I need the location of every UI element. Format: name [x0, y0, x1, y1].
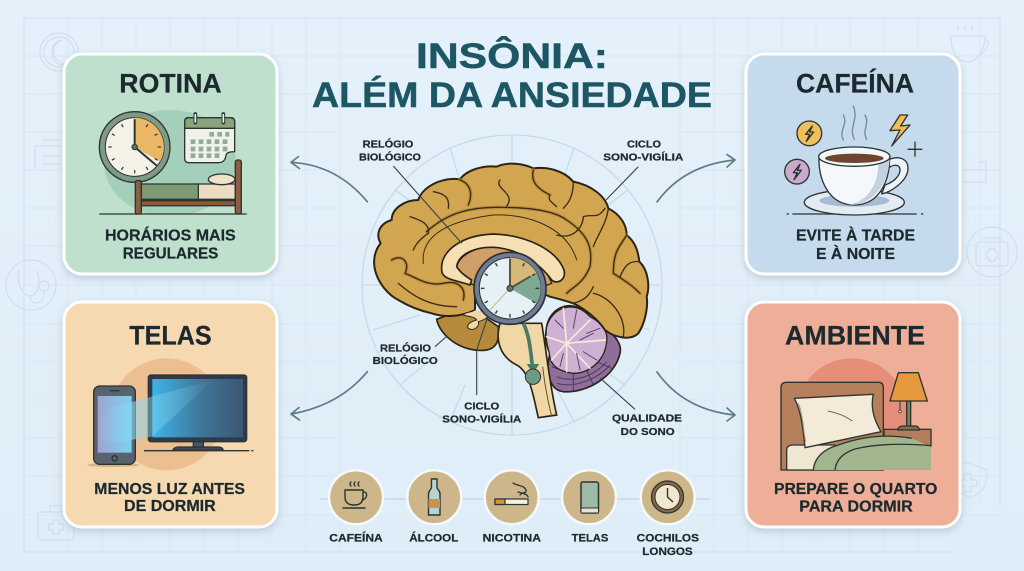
title line 1: INSÔNIA:: [416, 36, 608, 76]
label: relogio biologico bottom: [373, 342, 438, 367]
panel: rotina: [64, 54, 277, 274]
card background: [64, 302, 277, 527]
arrow: brain to telas: [291, 372, 367, 420]
leader line: qualidade: [600, 378, 635, 409]
label: ciclo sono-vigilia bottom: [442, 400, 522, 425]
label: relogio biologico bottom: BIOLÓGICO: [373, 354, 438, 367]
caption: E À NOITE: [816, 246, 895, 263]
panel: cafeina: [746, 54, 960, 274]
factor: cafeina: [329, 470, 383, 545]
arrow: brain to rotina: [291, 156, 367, 202]
background icon: bed: [35, 140, 62, 170]
panel: ambiente: [746, 302, 960, 527]
title line 2: ALÉM DA ANSIEDADE: [312, 75, 712, 115]
heading: ambiente: AMBIENTE: [785, 320, 925, 350]
illustration: phone and monitor: [87, 358, 253, 470]
arrow: brain to cafeina: [657, 154, 735, 202]
caption: [796, 228, 915, 263]
heading: telas: TELAS: [129, 320, 212, 350]
factor row: [329, 470, 699, 558]
card background: [746, 302, 960, 527]
factor: alcool: ÁLCOOL: [409, 532, 459, 545]
pituitary: [463, 310, 490, 329]
background icon: stethoscope: [6, 260, 56, 310]
caption: EVITE À TARDE: [796, 228, 915, 245]
caption: [774, 481, 937, 516]
label: ciclo sono-vigilia top: [603, 139, 684, 164]
caption: PREPARE O QUARTO: [774, 481, 937, 498]
card background: [746, 54, 960, 274]
arrow: brain to ambiente: [657, 372, 735, 421]
label: ciclo sono-vigilia bottom: CICLO: [464, 400, 499, 412]
factor: cochilos longos: COCHILOS: [637, 533, 699, 545]
factor: nicotina: [483, 470, 541, 545]
cerebellum: [546, 306, 620, 392]
label: relogio biologico top: [359, 138, 421, 164]
background icon: shield: [951, 462, 987, 498]
background icon: bed right: [962, 162, 986, 182]
leader line: relogio bottom: [435, 336, 447, 347]
label: relogio biologico top: RELÓGIO: [363, 138, 413, 151]
caption: DE DORMIR: [124, 498, 216, 515]
panel: telas: [64, 302, 277, 527]
heading: rotina: ROTINA: [119, 69, 222, 99]
label: relogio biologico bottom: RELÓGIO: [380, 342, 431, 355]
corpus callosum: [442, 234, 564, 285]
radial dial behind the brain: [362, 135, 662, 435]
background icon: medical kit: [38, 506, 74, 540]
leader line: ciclo bottom: [477, 316, 488, 395]
label: ciclo sono-vigilia bottom: SONO-VIGÍLIA: [442, 412, 522, 425]
card background: [64, 54, 277, 274]
label: relogio biologico top: BIOLÓGICO: [359, 151, 421, 164]
factor: cafeina: CAFEÍNA: [329, 532, 383, 545]
caption: REGULARES: [123, 245, 218, 262]
brainstem: [498, 323, 557, 418]
label: ciclo sono-vigilia top: CICLO: [627, 139, 661, 151]
heading: cafeina: CAFEÍNA: [796, 69, 914, 99]
factor: cochilos longos: LONGOS: [642, 546, 693, 558]
illustration: clock, calendar and bed: [99, 110, 247, 217]
label: ciclo sono-vigilia top: SONO-VIGÍLIA: [603, 151, 684, 164]
factor: telas: [562, 470, 616, 545]
brain folds: [392, 170, 640, 337]
fold shading: [392, 170, 640, 300]
caption: [105, 228, 236, 262]
title: [312, 36, 712, 115]
label: qualidade do sono: QUALIDADE: [612, 413, 682, 425]
factor: alcool: [407, 470, 461, 545]
caption: HORÁRIOS MAIS: [105, 228, 236, 245]
illustration: bed and lamp: [781, 358, 931, 470]
background icon: kit in circle: [967, 227, 1017, 277]
factor: telas: TELAS: [572, 533, 608, 545]
leader line: relogio top: [393, 166, 462, 243]
cerebrum: [374, 164, 648, 338]
factor: nicotina: NICOTINA: [483, 533, 541, 545]
label: qualidade do sono: DO SONO: [621, 426, 675, 438]
brain illustration: [374, 164, 648, 418]
bottom connector line: [320, 498, 710, 500]
caption: MENOS LUZ ANTES: [94, 481, 245, 498]
temporal lobe: [437, 307, 499, 350]
caption: PARA DORMIR: [799, 499, 913, 516]
illustration: coffee cup: [785, 106, 923, 215]
background icon: moon clock: [40, 33, 78, 71]
label: qualidade do sono: [612, 413, 682, 438]
thalamus: [457, 246, 552, 300]
background icon: cup: [951, 25, 988, 62]
dial clock: [474, 252, 546, 324]
factor: cochilos longos: [637, 470, 699, 558]
caption: [94, 481, 245, 515]
leader line: ciclo top: [606, 167, 638, 200]
